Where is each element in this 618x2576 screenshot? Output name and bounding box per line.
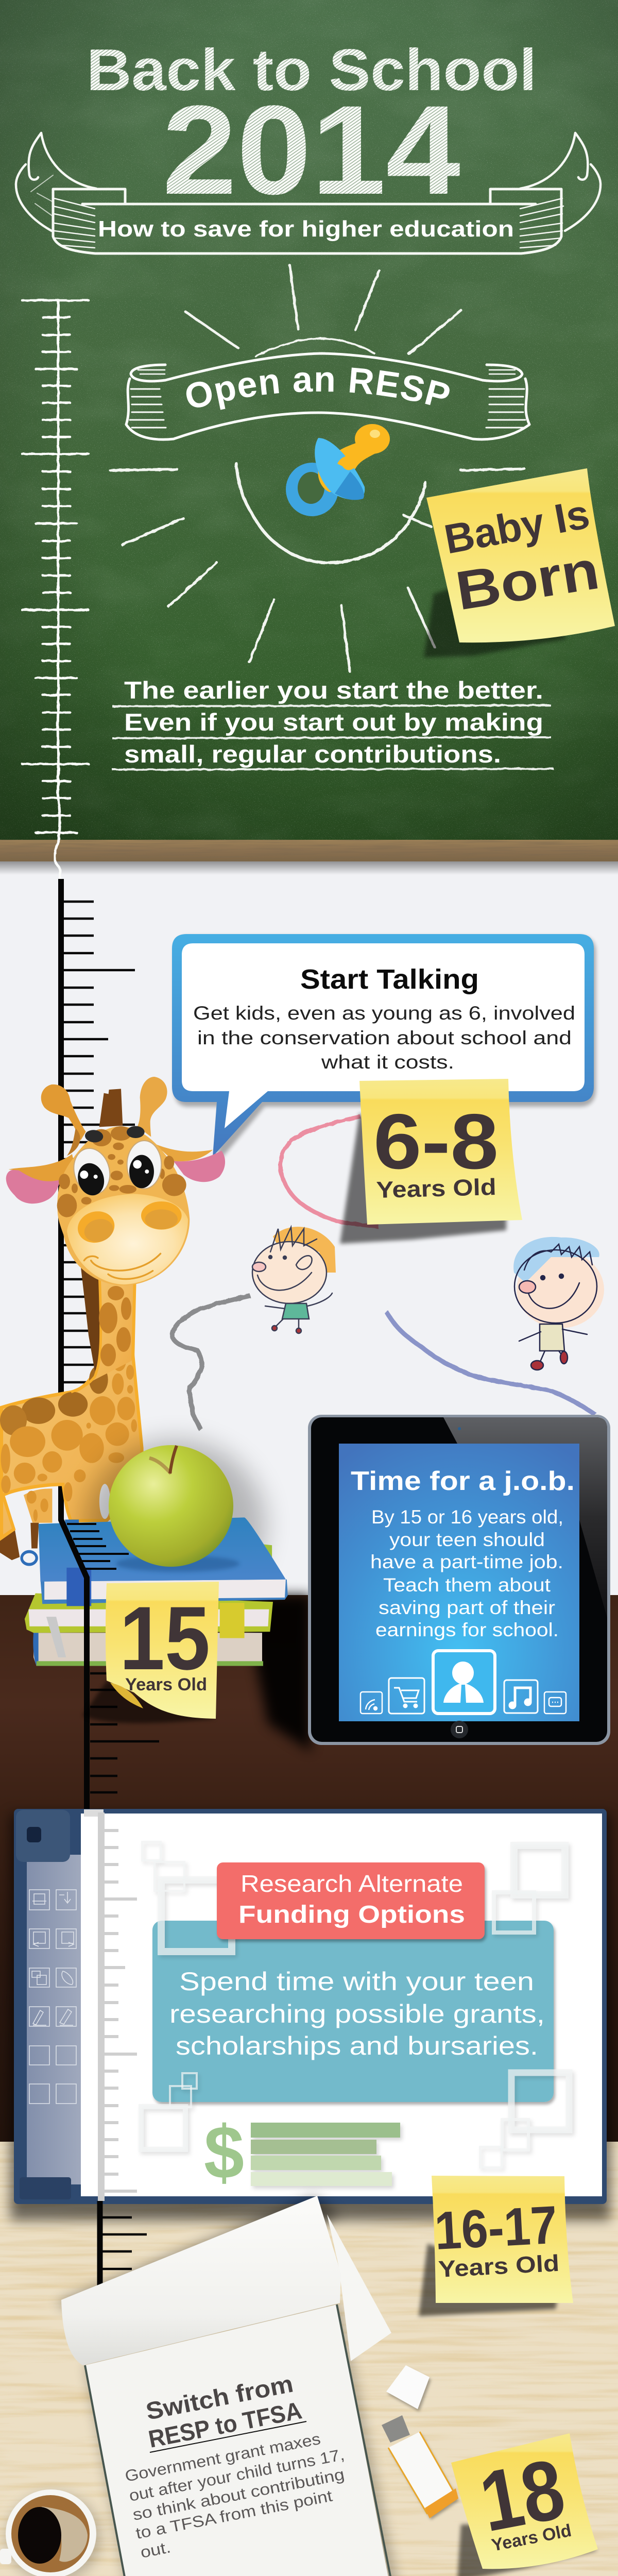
- tablet screen: [339, 1444, 579, 1721]
- planner top clip: [16, 1810, 70, 1862]
- notepad rolled page shadow: [57, 2196, 340, 2329]
- tablet heading: Time for a j.o.b.: [351, 1466, 575, 1496]
- ruler: black section on table: [100, 2201, 147, 2293]
- notepad heading: RESP to TFSA: [146, 2396, 304, 2453]
- background: dark wooden desk: [0, 1595, 618, 2142]
- bubble heading: Start Talking: [300, 964, 479, 995]
- chalk scribble: grey: [172, 1296, 250, 1430]
- sticky note: 16-17 Years Old: Years Old: [438, 2250, 560, 2282]
- kid drawing: blue hair: [513, 1237, 604, 1370]
- giraffe neck: [71, 1267, 135, 1392]
- decorative translucent frames: [141, 1842, 569, 2167]
- speech bubble: Start Talking: [172, 934, 596, 1163]
- sticky note: 15 Years Old: 15: [119, 1588, 210, 1689]
- background: paper wall: [0, 861, 618, 1598]
- panel: planner: [14, 1809, 607, 2204]
- stack of books: [22, 1517, 288, 1666]
- sticky note: 6-8 Years Old: Years Old: [376, 1174, 496, 1203]
- tablet body text: saving part of their: [379, 1597, 555, 1618]
- teal panel body text: scholarships and bursaries.: [176, 2031, 538, 2060]
- notepad heading underline: [150, 2421, 306, 2452]
- growth ruler: chalk section: [22, 300, 89, 879]
- notepad heading: Switch from: [144, 2369, 296, 2425]
- tablet body text: earnings for school.: [375, 1619, 559, 1640]
- ribbon: Open an RESP: [126, 353, 529, 439]
- giraffe head: [6, 1077, 225, 1285]
- ruler ticks on book: [67, 1524, 129, 1569]
- tablet body text: have a part-time job.: [370, 1551, 563, 1572]
- sticky note: 18 Years Old: 18: [473, 2441, 572, 2549]
- tagline text: Even if you start out by making: [124, 708, 543, 736]
- tablet home button: [451, 1721, 468, 1738]
- tagline text: The earlier you start the better.: [124, 676, 543, 704]
- red heading box: Research Alternate: [241, 1870, 463, 1897]
- sticky note: 15 Years Old: [82, 1582, 219, 1723]
- planner shadow: [10, 1814, 610, 2221]
- icon: wifi: [360, 1692, 382, 1714]
- bubble body: [193, 1003, 575, 1073]
- notepad body text: to a TFSA from this point: [134, 2486, 334, 2543]
- panel: chalkboard: [0, 0, 618, 874]
- notepad body text: [124, 2430, 346, 2562]
- bottom book: [33, 1633, 263, 1666]
- tagline text: small, regular contributions.: [124, 740, 501, 768]
- red heading box: Funding Options: [238, 1901, 465, 1928]
- chalk underlines: [112, 705, 554, 770]
- notepad body text: out.: [139, 2538, 172, 2562]
- teal panel body text: Spend time with your teen: [179, 1967, 534, 1996]
- bubble body: in the conservation about school and: [197, 1027, 572, 1048]
- notepad: [57, 2196, 409, 2576]
- chalk scribble: blue: [386, 1312, 595, 1415]
- red heading box: [217, 1862, 485, 1939]
- notepad heading: [144, 2369, 304, 2453]
- green bars: [251, 2123, 400, 2186]
- icon: chat: [544, 1692, 566, 1714]
- sticky note: 6-8 Years Old: [340, 1079, 522, 1244]
- icon: shopping cart: [389, 1678, 424, 1714]
- white USB cap: [386, 2365, 430, 2409]
- sticky note: 18 Years Old: Years Old: [490, 2521, 573, 2555]
- sticky note: 6-8 Years Old: 6-8: [373, 1098, 499, 1185]
- subtitle: How to save for higher education: [98, 216, 514, 242]
- ruler ticks on desk: [90, 1673, 159, 1792]
- tagline text: [124, 676, 543, 768]
- bubble body: Get kids, even as young as 6, involved: [193, 1003, 575, 1024]
- icon: music note: [504, 1680, 538, 1713]
- chalk sun rays: [110, 265, 524, 671]
- green book: [25, 1594, 273, 1657]
- tablet body text: [370, 1506, 563, 1640]
- sticky note: Baby Is Born: [424, 468, 615, 657]
- ruler redraw over book: [61, 1520, 87, 1809]
- title: 2014: 2014: [162, 79, 460, 221]
- icon: dollar sign: $: [204, 2110, 244, 2194]
- coffee cup: [0, 2489, 101, 2576]
- notepad rolled page: [61, 2196, 341, 2365]
- tablet body text: Teach them about: [383, 1574, 551, 1596]
- icon: pacifier: [286, 424, 390, 516]
- notepad back flap: [327, 2214, 391, 2361]
- planner toolbar icons: [29, 1890, 76, 2104]
- teal panel body text: [169, 1967, 545, 2060]
- apple: [109, 1445, 239, 1572]
- kid drawing: orange hair: [252, 1227, 336, 1333]
- notepad body text: Government grant maxes: [124, 2430, 322, 2485]
- sticky note: Baby Is Born: Born: [452, 539, 603, 622]
- tablet body text: By 15 or 16 years old,: [371, 1506, 563, 1528]
- background: light wood table: [0, 2142, 618, 2576]
- notepad page: [85, 2304, 400, 2576]
- teal panel body text: researching possible grants,: [169, 1999, 545, 2028]
- sticky note: Baby Is Born: Baby Is: [441, 490, 593, 563]
- apple and books shadow on wall: [85, 1440, 265, 1610]
- title: Back to School: Back to School: [87, 38, 537, 103]
- notepad body text: out after your child turns 17,: [128, 2445, 346, 2505]
- growth ruler: black section: [61, 879, 135, 1809]
- sticky note: 16-17 Years Old: [419, 2176, 573, 2316]
- teal text panel: [152, 1921, 554, 2102]
- green tab: [262, 1544, 272, 1560]
- giraffe: [0, 1077, 225, 1560]
- sticky note: 16-17 Years Old: 16-17: [433, 2195, 559, 2261]
- sticky note: 15 Years Old: Years Old: [125, 1675, 207, 1694]
- desk shadow beside books: [242, 1595, 311, 1752]
- notepad body text: so think about contributing: [131, 2465, 346, 2524]
- planner bottom clip: [20, 2177, 71, 2199]
- giraffe body and legs: [0, 1350, 142, 1560]
- bubble body: what it costs.: [321, 1052, 454, 1073]
- title ribbon banner: [16, 133, 600, 253]
- USB stick: [382, 2415, 458, 2518]
- tablet: [308, 1415, 610, 1745]
- tablet body text: your teen should: [389, 1529, 545, 1550]
- ribbon label: Open an RESP: [186, 368, 450, 410]
- ruler: faded section on planner: [84, 1809, 137, 2201]
- chalk scribble: pink: [280, 1116, 379, 1227]
- sticky note: 18 Years Old: [451, 2433, 598, 2576]
- blue book: [22, 1517, 288, 1606]
- wooden chalk ledge: [0, 840, 618, 875]
- icon: job person: [433, 1651, 495, 1714]
